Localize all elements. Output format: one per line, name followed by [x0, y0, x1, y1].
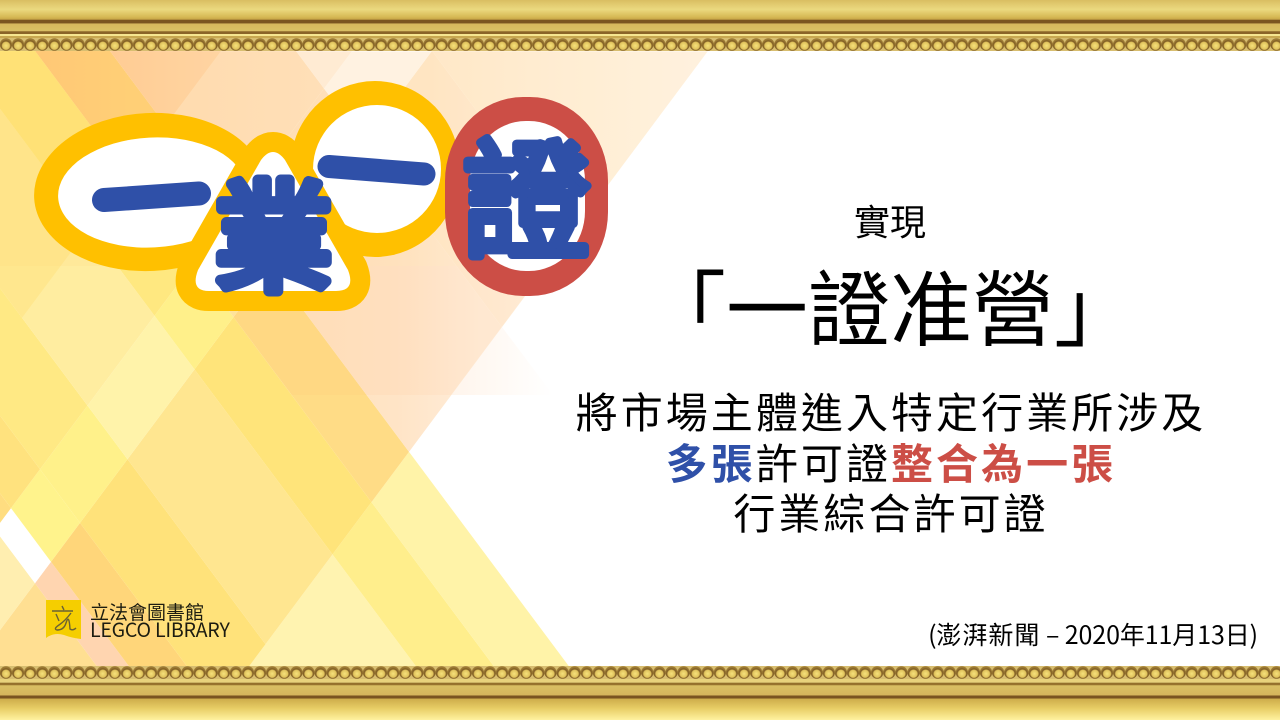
text block: description: 將市場主體進入特定行業所涉及 [576, 380, 1206, 441]
top gold frame [0, 0, 1280, 51]
source note: (澎湃新聞 – 2020年11月13日) [928, 616, 1258, 652]
text block: description: 行業綜合許可證 [733, 481, 1049, 542]
character: 證: 證 [462, 99, 591, 284]
bottom gold frame [0, 666, 1280, 720]
heading: 「一證准營」: 「一證准營」 [644, 244, 1136, 363]
character: right 一 [329, 166, 424, 174]
text block: description: 多張許可證整合為一張 [666, 431, 1116, 492]
logo text English: LEGCO LIBRARY [90, 614, 230, 643]
logo: LegCo Library [46, 598, 230, 643]
icon: yellow flag emblem [46, 600, 81, 639]
badge: right circle [290, 81, 460, 257]
badge: red pill [445, 97, 608, 296]
character: 業: 業 [214, 142, 334, 316]
badge: left oval [30, 107, 270, 277]
text: 實現: 實現 [854, 194, 926, 246]
title graphic: 一業一證 [34, 81, 608, 316]
background: overlapping diagonal bands [0, 51, 708, 666]
character: left 一 [104, 194, 199, 200]
badge: centre triangle [196, 152, 350, 291]
text block: description [576, 380, 1206, 542]
logo text Chinese: 立法會圖書館 [90, 598, 204, 625]
